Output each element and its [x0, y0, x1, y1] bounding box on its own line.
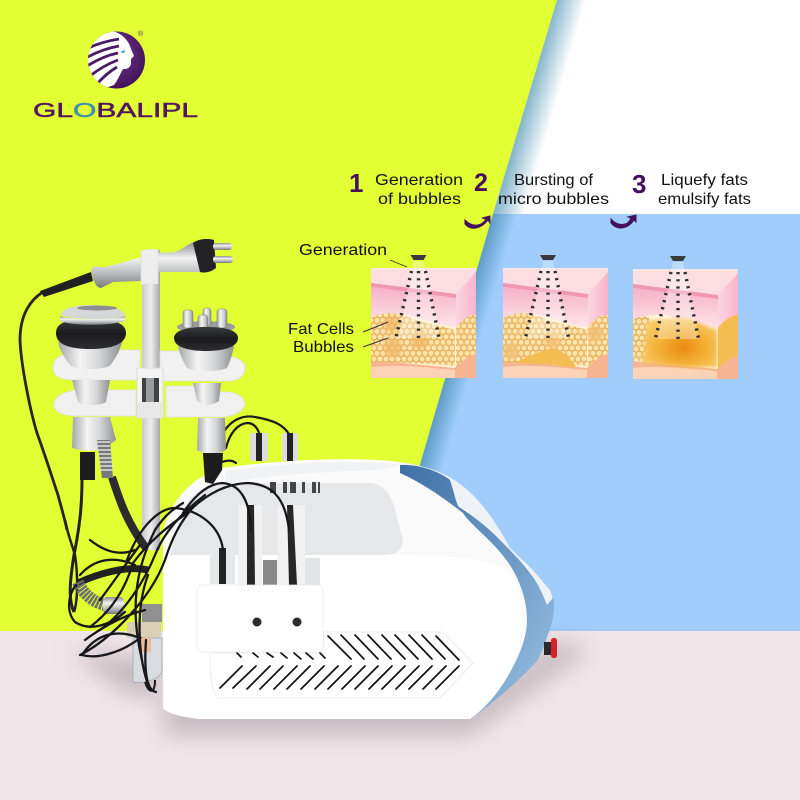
fat layer [371, 313, 455, 366]
machine: red emergency button [544, 638, 557, 658]
background: floor [0, 631, 800, 800]
transducer beam [525, 255, 569, 340]
chrome rim [60, 316, 125, 325]
residual fat [633, 317, 649, 361]
step 3 heading: Liquefy fats [661, 172, 748, 189]
step 1 heading: Generation [375, 172, 463, 189]
logo registered mark: ® [138, 29, 144, 38]
machine: rear connectors [250, 433, 298, 461]
leader: Fat Cells [363, 322, 388, 332]
diagram: step 2 skin panel [503, 255, 608, 378]
step 2 heading: micro bubbles [498, 191, 609, 208]
leader: Generation [390, 260, 407, 267]
machine: coiled hose [78, 569, 148, 614]
background: white header band [493, 0, 800, 214]
machine: tray clamp [137, 368, 163, 418]
transducer beam [655, 256, 699, 341]
step 2 heading [498, 172, 609, 208]
machine: support tray upper [53, 350, 245, 381]
machine: front cables [69, 483, 289, 692]
handle [91, 242, 201, 288]
arrow: step 2 to 3 [611, 215, 636, 228]
liquefied side fat [718, 315, 738, 369]
electrode base [177, 321, 235, 333]
bursting pool [515, 348, 577, 368]
main white shell [163, 459, 527, 719]
black collar [193, 239, 216, 273]
step 1 heading [375, 172, 463, 208]
plate recess [77, 306, 117, 310]
step 3 number: 3 [632, 169, 646, 199]
label: Bubbles: Bubbles [293, 339, 354, 356]
logo [33, 29, 198, 122]
machine: rear cables [222, 416, 290, 463]
step 2 number: 2 [474, 169, 488, 197]
floor shadow [70, 640, 590, 735]
leader: Bubbles [363, 338, 388, 347]
machine: vent grille [210, 632, 473, 698]
neck [193, 383, 221, 405]
step 2 heading: Bursting of [514, 172, 594, 189]
handle recess [170, 483, 403, 555]
step 3 heading: emulsify fats [658, 191, 751, 208]
electrode pins [183, 308, 227, 332]
machine: hose connectors [80, 440, 223, 484]
label: Fat Cells: Fat Cells [288, 321, 354, 338]
bubbles [383, 316, 429, 357]
diagram: step 3 skin panel [633, 256, 738, 379]
blue accent [400, 465, 554, 719]
pole clamp [141, 249, 158, 284]
background: lime panel [0, 0, 800, 640]
holder sockets [252, 618, 262, 626]
machine: water filter and fittings [127, 604, 162, 691]
transducer beam [396, 255, 440, 340]
machine: probe connectors [210, 505, 320, 585]
silver cone [178, 346, 234, 371]
silver cone [58, 342, 122, 369]
lower barrel [72, 417, 116, 451]
diagram: step 1 skin panel [371, 255, 476, 378]
rear cap [400, 462, 553, 718]
step 1 number: 1 [349, 168, 363, 198]
machine: support tray lower [54, 386, 245, 417]
logo face and hair [88, 32, 134, 88]
strain relief [40, 272, 93, 297]
neck [72, 380, 110, 405]
step 3 heading [658, 172, 751, 208]
electrodes [213, 243, 233, 263]
bubbles [503, 326, 603, 359]
cable [20, 292, 67, 530]
fat layer [503, 313, 587, 366]
step 1 heading: of bubbles [378, 191, 461, 208]
background: diagonal shadow on blue [369, 214, 520, 640]
liquefied fat [641, 318, 717, 368]
machine: large cavitation head [56, 305, 126, 451]
top plate [61, 305, 125, 319]
lower barrel [197, 418, 226, 454]
logo wordmark: GL O BALIPL [33, 100, 198, 122]
machine: multi-pole RF head [174, 308, 238, 454]
handle top rim [225, 462, 400, 484]
machine: body [163, 459, 554, 719]
machine: hanging handpiece cables [65, 477, 146, 612]
rear probes seen through handle [270, 482, 320, 493]
background: blue panel [369, 214, 800, 640]
machine: probe holder block [197, 585, 323, 652]
machine: top handpiece [20, 239, 233, 530]
machine: stand pole [142, 250, 160, 550]
label: Generation: Generation [299, 242, 387, 259]
arrow: step 1 to 2 [465, 216, 490, 228]
logo globe [88, 32, 145, 88]
black band [56, 319, 126, 349]
lower shell shading [163, 555, 522, 719]
background: diagonal shadow on white [493, 0, 588, 214]
black band [174, 327, 238, 351]
